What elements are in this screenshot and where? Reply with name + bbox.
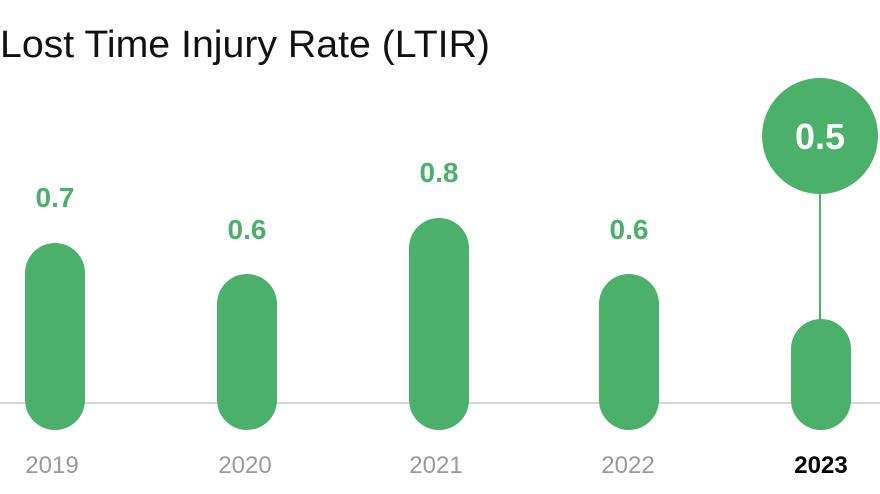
- bar 2021: 0.8: [420, 157, 458, 188]
- bar 2020: [217, 214, 277, 430]
- year labels: 2019: [25, 452, 79, 479]
- bar 2020: 0.6: [228, 214, 266, 245]
- bar 2021: [409, 157, 469, 430]
- year labels: 2021: [409, 452, 463, 479]
- year labels: 2022: [601, 452, 655, 479]
- bar 2019: [25, 182, 85, 430]
- title: Lost Time Injury Rate (LTIR): [0, 24, 490, 66]
- year labels: 2020: [218, 452, 272, 479]
- bar 2019: 0.7: [36, 182, 74, 213]
- year labels: [25, 452, 848, 479]
- bar 2023 with callout: [762, 78, 878, 430]
- bar 2022: [599, 214, 659, 430]
- bar 2023 with callout: 0.5: [795, 116, 845, 157]
- bar 2022: 0.6: [610, 214, 648, 245]
- year labels: 2023: [794, 452, 848, 479]
